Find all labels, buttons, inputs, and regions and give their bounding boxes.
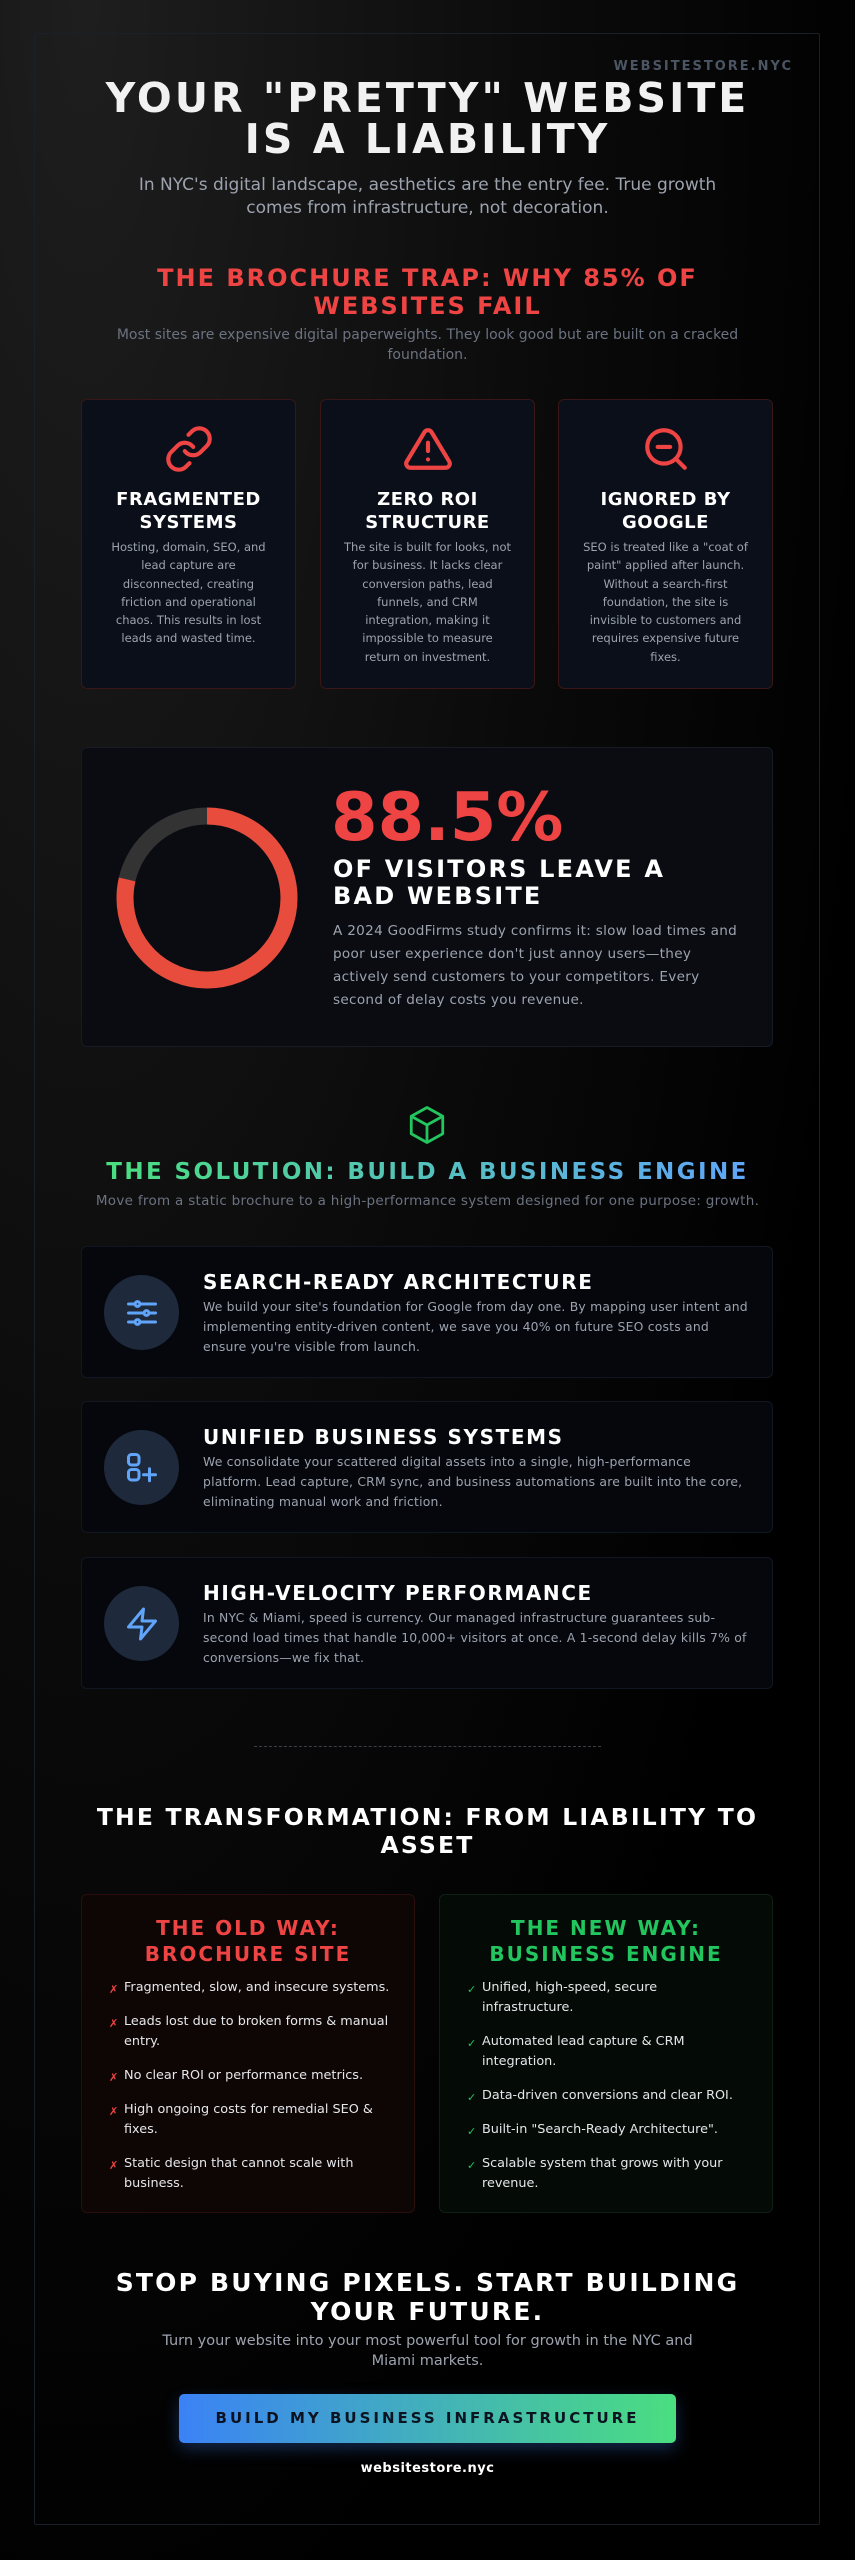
panel: zero roi (320, 399, 535, 689)
panel: old way (81, 1894, 415, 2213)
panel: ignored by google: SEO is treated like a "coat of paint" applied after launch. Without a search-first foundation, the site is invisible to customers and requires expensive future fixes. (583, 540, 748, 664)
heading: transformation: THE TRANSFORMATION: FROM LIABILITY TO (97, 1803, 758, 1831)
feature: unified: eliminating manual work and friction. (203, 1494, 443, 1509)
list: old way: ✗ (109, 2017, 118, 2030)
footer url: websitestore.nyc (361, 2461, 494, 2476)
brand label: WEBSITESTORE.NYC (613, 59, 793, 74)
list: old way: ✗ (109, 1983, 118, 1996)
cta button: BUILD MY BUSINESS INFRASTRUCTURE (216, 2409, 639, 2427)
subtitle: comes from infrastructure, not decoration. (246, 198, 609, 218)
title: IS A LIABILITY (245, 115, 610, 163)
stat text: A 2024 GoodFirms study confirms it: slow load times and poor user experience don't just annoy users—they actively send customers to your competitors. Every second of delay costs you revenue. (333, 923, 737, 1008)
list: old way: High ongoing costs for remedial SEO & fixes. (124, 2102, 373, 2137)
list: old way: Static design that cannot scale with business. (124, 2156, 353, 2191)
heading: brochure trap (157, 264, 698, 320)
panel: ignored by google: GOOGLE (622, 512, 709, 533)
panel: new way: THE NEW WAY: (511, 1916, 701, 1940)
icon: warning (404, 428, 452, 470)
list: old way: No clear ROI or performance metrics. (124, 2068, 363, 2083)
heading: brochure trap: WEBSITES FAIL (313, 292, 542, 320)
icon: chain link (166, 426, 212, 472)
heading: brochure trap: THE BROCHURE TRAP: WHY 85% OF (157, 264, 698, 292)
feature: performance: conversions—we fix that. (203, 1650, 364, 1665)
feature: search-ready: implementing entity-driven content, we save you 40% on future SEO costs and (203, 1319, 709, 1334)
list: new way: Automated lead capture & CRM (482, 2034, 685, 2049)
list: old way: ✗ (109, 2105, 118, 2118)
icon: sliders (104, 1275, 179, 1350)
feature: unified: UNIFIED BUSINESS SYSTEMS (203, 1425, 564, 1449)
list: new way: infrastructure. (482, 2000, 573, 2015)
cta button (179, 2394, 676, 2443)
list: new way: Scalable system that grows with your (482, 2156, 723, 2171)
list: old way: ✗ (109, 2071, 118, 2084)
panel: fragmented systems (81, 399, 296, 689)
cta heading: YOUR FUTURE. (311, 2297, 544, 2326)
list: new way: ✓ (467, 2037, 476, 2050)
list: new way: ✓ (467, 2159, 476, 2172)
title (105, 74, 749, 163)
list: new way: revenue. (482, 2176, 538, 2191)
subtitle: In NYC's digital landscape, aesthetics are the entry fee. True growth (139, 175, 716, 195)
list: new way: ✓ (467, 2125, 476, 2138)
cta subtext: Miami markets. (372, 2353, 483, 2369)
stat heading: OF VISITORS LEAVE A (333, 855, 665, 883)
feature: unified: platform. Lead capture, CRM sync, and business automations are built into the core, (203, 1474, 742, 1489)
cta subtext (162, 2333, 693, 2369)
icon: lightning (104, 1586, 179, 1661)
feature: performance: second load times that handle 10,000+ visitors at once. A 1-second delay kills 7% of (203, 1630, 747, 1645)
panel: old way: THE OLD WAY: (156, 1916, 340, 1940)
list: old way (109, 1980, 389, 2191)
list: new way: Built-in "Search-Ready Architecture". (482, 2122, 718, 2137)
feature: search-ready: We build your site's foundation for Google from day one. By mapping user intent and (203, 1299, 748, 1314)
feature: search-ready (81, 1246, 773, 1378)
heading: solution: THE SOLUTION: BUILD A BUSINESS ENGINE (106, 1159, 749, 1185)
solution subheading: Move from a static brochure to a high-performance system designed for one purpose: growth. (96, 1193, 759, 1209)
icon: cube (410, 1106, 444, 1144)
heading: transformation (97, 1803, 758, 1859)
stat heading (333, 855, 665, 910)
subheading: Most sites are expensive digital paperweights. They look good but are built on a cracked (117, 327, 738, 343)
list: new way: ✓ (467, 1983, 476, 1996)
feature: performance: In NYC & Miami, speed is currency. Our managed infrastructure guarantees sub- (203, 1610, 715, 1625)
panel: ignored by google (558, 399, 773, 689)
stat heading: BAD WEBSITE (333, 882, 542, 910)
donut chart (116, 808, 298, 988)
panel: statistic (81, 747, 773, 1047)
feature: performance: HIGH-VELOCITY PERFORMANCE (203, 1581, 593, 1605)
list: old way: Leads lost due to broken forms & manual entry. (124, 2014, 388, 2049)
subtitle (139, 175, 716, 218)
heading: transformation: ASSET (380, 1831, 475, 1859)
panel: fragmented systems: Hosting, domain, SEO, and lead capture are disconnected, creating friction and operational chaos. This results in lost leads and wasted time. (111, 540, 266, 645)
feature: search-ready: ensure you're visible from launch. (203, 1339, 420, 1354)
subheading: foundation. (388, 346, 467, 362)
icon: blocks plus (104, 1430, 179, 1505)
feature: unified: We consolidate your scattered digital assets into a single, high-performance (203, 1454, 691, 1469)
feature: search-ready: SEARCH-READY ARCHITECTURE (203, 1270, 593, 1294)
cta subtext: Turn your website into your most powerful tool for growth in the NYC and (162, 2333, 693, 2349)
list: new way (467, 1980, 733, 2191)
cta heading: STOP BUYING PIXELS. START BUILDING (116, 2268, 739, 2297)
feature: performance (81, 1557, 773, 1689)
panel: zero roi: The site is built for looks, not for business. It lacks clear conversion paths, lead funnels, and CRM integration, making it impossible to measure return on investment. (344, 540, 511, 664)
big number: 88.5% (331, 778, 563, 856)
panel: zero roi: STRUCTURE (365, 512, 490, 533)
list: old way: ✗ (109, 2159, 118, 2172)
panel: new way (439, 1894, 773, 2213)
panel: fragmented systems: FRAGMENTED (116, 489, 261, 510)
list: new way: Unified, high-speed, secure (482, 1980, 657, 1995)
list: new way: ✓ (467, 2091, 476, 2104)
panel: new way: BUSINESS ENGINE (489, 1942, 723, 1966)
icon: zoom out (645, 428, 687, 470)
feature: unified (81, 1401, 773, 1533)
panel: ignored by google: IGNORED BY (600, 489, 730, 510)
panel: zero roi: ZERO ROI (377, 489, 478, 510)
subheading (117, 327, 738, 362)
panel: old way: BROCHURE SITE (145, 1942, 351, 1966)
panel: fragmented systems: SYSTEMS (140, 512, 237, 533)
title: YOUR "PRETTY" WEBSITE (106, 74, 749, 122)
cta heading (116, 2268, 739, 2326)
list: new way: integration. (482, 2054, 556, 2069)
list: old way: Fragmented, slow, and insecure systems. (124, 1980, 389, 1995)
list: new way: Data-driven conversions and clear ROI. (482, 2088, 733, 2103)
